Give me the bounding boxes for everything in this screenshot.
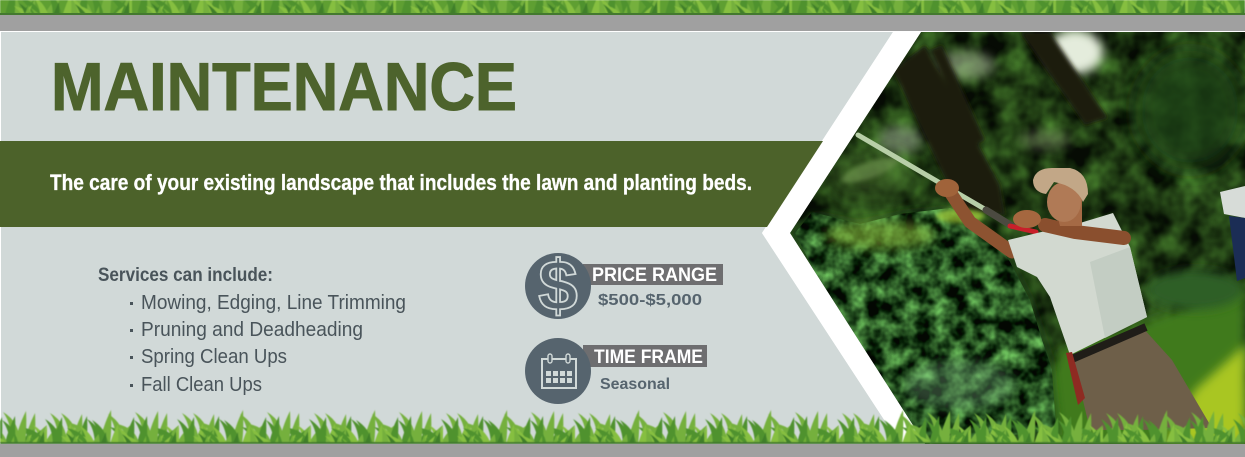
top gray bar (0, 15, 1245, 31)
photo background foliage (780, 30, 1245, 444)
neck and face (1058, 197, 1082, 226)
price range label bar (583, 264, 723, 285)
gardener (935, 168, 1212, 430)
holster (1066, 352, 1085, 405)
time frame label bar (583, 345, 707, 367)
bottom grass strip (0, 410, 1245, 444)
service item: mowing: Mowing, Edging, Line Trimming (141, 292, 406, 314)
price range value: $500-$5,000 (598, 292, 702, 309)
description text: The care of your existing landscape that includes the lawn and planting beds. (50, 170, 752, 195)
icon: calendar (525, 338, 591, 404)
bottom gray bar (0, 444, 1245, 457)
green description band (0, 141, 823, 227)
pants (1073, 328, 1212, 430)
belt (1072, 327, 1146, 359)
service item: pruning: Pruning and Deadheading (141, 319, 363, 341)
near hand (1013, 210, 1041, 228)
far arm (950, 192, 1012, 252)
photo: gardener pruning a shrub (780, 30, 1245, 450)
price range heading: PRICE RANGE (592, 265, 717, 286)
services heading: Services can include: (98, 265, 273, 286)
price range callout (525, 247, 723, 326)
cap (1033, 168, 1088, 202)
icon: dollar sign: $ (538, 247, 578, 326)
near arm (1045, 225, 1124, 238)
time frame value: Seasonal (600, 376, 670, 393)
shrub (790, 152, 1060, 450)
title: MAINTENANCE (51, 49, 517, 125)
time frame heading: TIME FRAME (594, 347, 703, 368)
services list (98, 265, 406, 396)
sunlit lawn (1040, 270, 1245, 444)
service item: spring clean ups: Spring Clean Ups (141, 346, 287, 368)
far hand (935, 179, 959, 197)
tree trunks (893, 32, 1108, 215)
time frame callout (525, 338, 707, 404)
background worker (1220, 186, 1245, 281)
top grass strip (0, 0, 1245, 15)
shirt (1008, 213, 1147, 355)
pale gray content panel (1, 32, 900, 444)
pole pruner (858, 135, 1036, 232)
icon: dollar sign (525, 247, 591, 326)
service item: fall clean ups: Fall Clean Ups (141, 374, 262, 396)
white chevron stripe edge over the photo (762, 32, 925, 444)
